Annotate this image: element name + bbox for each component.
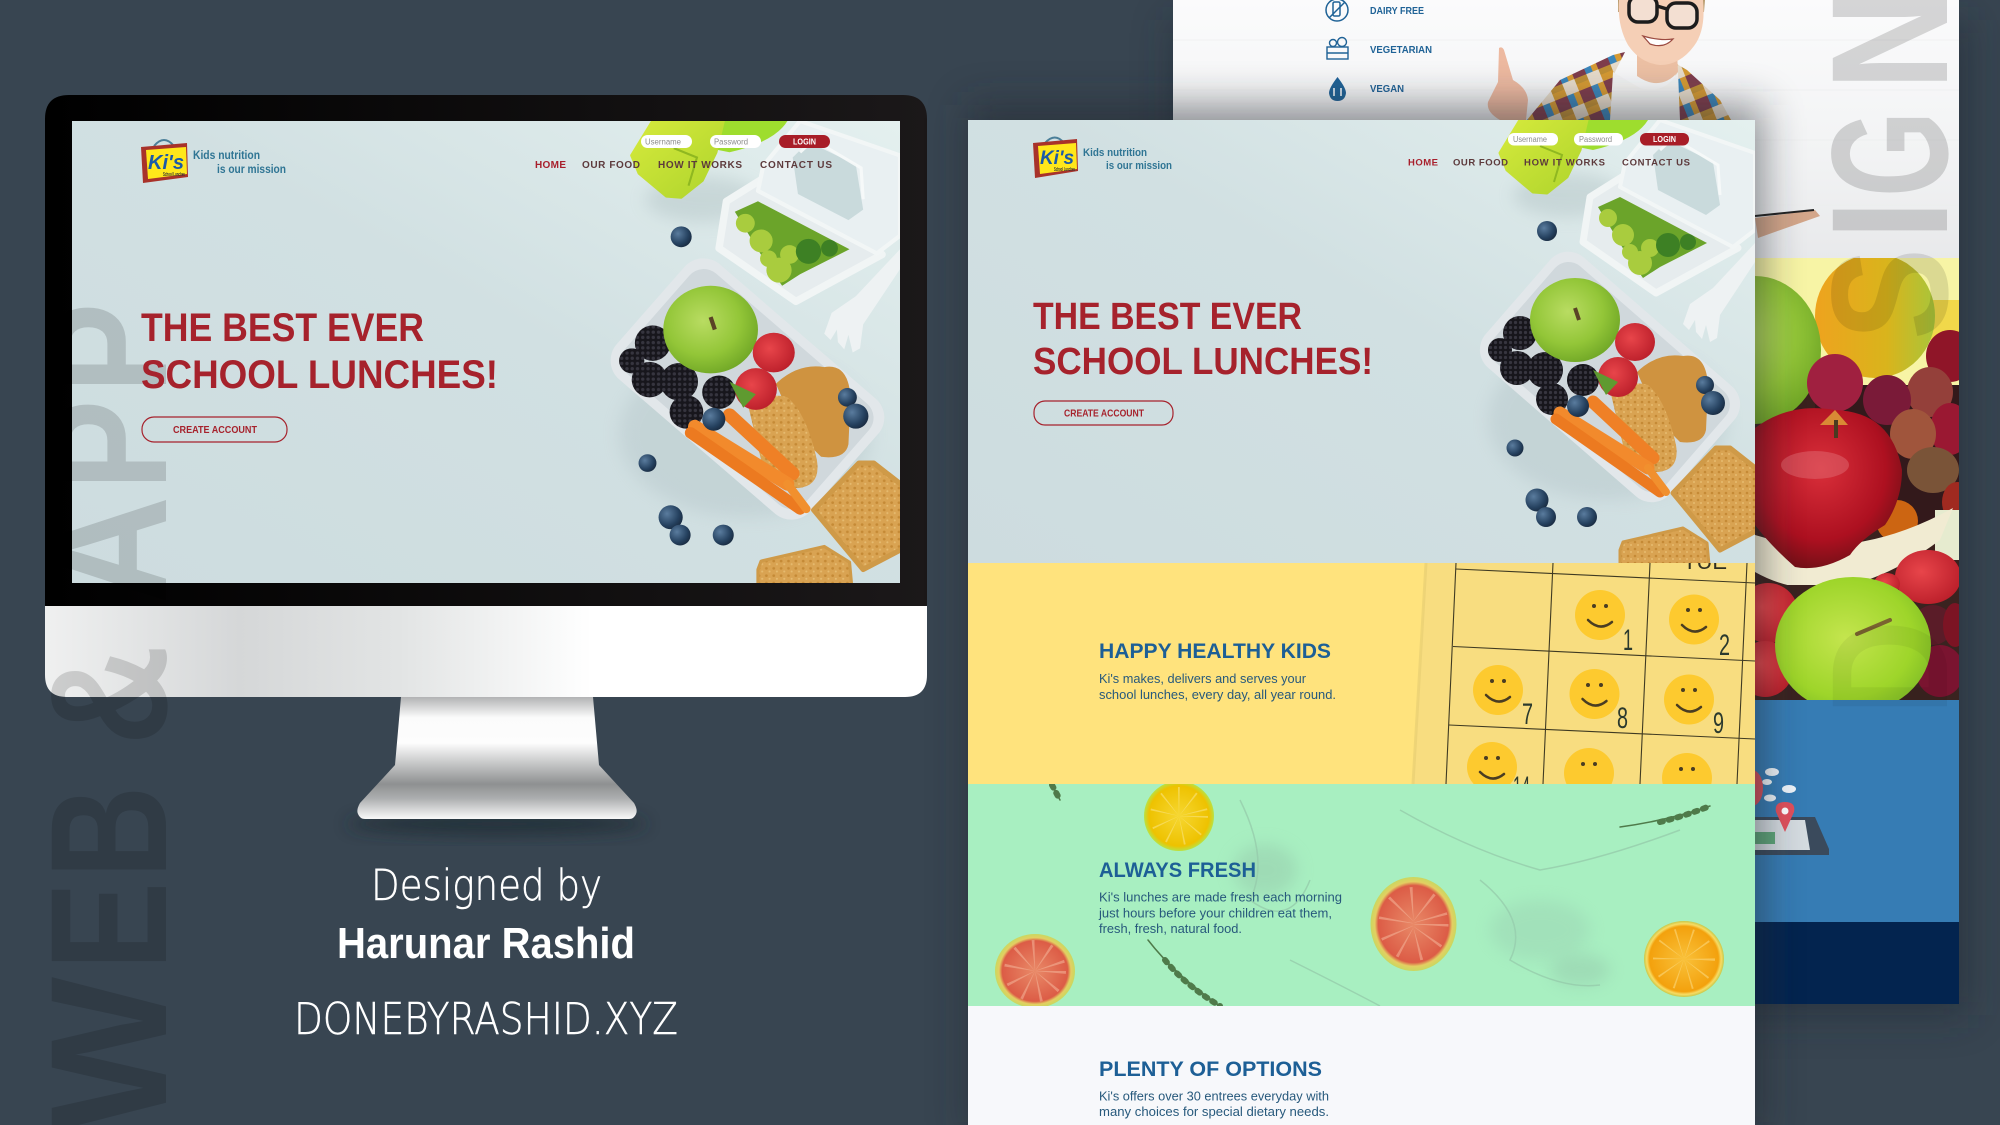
body text: school lunches, every day, all year round. [1099,688,1336,702]
body text [1099,1090,1329,1119]
watermark: WEB & APP: B [17,786,202,878]
icon: dairy free [1326,0,1348,21]
monitor screen background [72,121,900,583]
calendar grid [1446,563,1755,784]
label: vegan: VEGAN [1370,84,1404,95]
logo tagline [1083,147,1172,172]
logo: lunchbox: School Lunches [1054,167,1075,173]
monitor hero content [141,135,832,442]
headline [1033,296,1373,383]
smiley faces [1467,590,1719,803]
body text: Ki's makes, delivers and serves your [1099,672,1306,686]
navigation: HOME [1408,158,1438,168]
fruit: small orange [1878,500,1918,537]
panel: navy footer [1755,922,1959,1004]
watermark: DESIGN: G [1798,111,1983,197]
body text: fresh, fresh, natural food. [1099,922,1242,936]
label: vegetarian: VEGETARIAN [1370,45,1432,56]
heading: PLENTY OF OPTIONS [1099,1058,1322,1081]
boy glasses [1629,0,1697,28]
fruit: strawberries [1737,550,1961,697]
option icons and labels [1326,0,1432,101]
lemon slice [1144,781,1214,851]
login form [1508,133,1689,146]
logo tagline: is our mission [1106,160,1172,172]
login form: Password [1579,135,1612,144]
login form: Username [1513,135,1548,144]
logo tagline [193,150,286,176]
navigation [535,160,832,171]
credit: designed by [294,861,678,1045]
panel: fruit photo [1755,258,1959,700]
body text: just hours before your children eat them, [1098,906,1332,920]
logo: lunchbox: Ki's [1040,148,1074,169]
fruit: green apple left [1755,276,1821,424]
navigation: HOW IT WORKS [658,160,742,171]
panel: white options section [1173,0,1959,258]
logo: lunchbox: Ki's [148,152,184,174]
herb sprigs [1052,785,1710,1006]
logo tagline: Kids nutrition [193,150,260,162]
watermark: WEB & APP: P [17,303,202,393]
back page shadow [1173,20,1968,1015]
body text: Ki's offers over 30 entrees everyday with [1099,1090,1329,1104]
panel: plenty of options [968,1006,1755,1125]
headline: SCHOOL LUNCHES! [141,353,498,397]
headline: THE BEST EVER [1033,296,1302,338]
fruit: yellow citrus [1815,254,1935,378]
calendar numbers: 8 [1617,702,1628,735]
boy smile [1643,36,1673,46]
login form: Username [645,138,682,146]
orange slice [1644,921,1724,997]
calendar weekday labels: MON [1590,543,1641,568]
logo: lunchbox [1033,138,1078,178]
fruit: lower grapes [1920,605,1946,645]
front page [968,120,1758,1125]
watermark: WEB & APP: E [17,882,202,970]
watermark: DESIGN: D [1798,620,1983,715]
credit: designed by: Harunar Rashid [337,919,635,968]
logo: lunchbox: School Lunches [163,172,185,178]
food photo [1470,120,1758,565]
calendar weekday labels [1590,543,1727,574]
heading: HAPPY HEALTHY KIDS [1099,640,1331,663]
calendar numbers [1513,624,1730,804]
icon: vegetarian crate [1327,38,1348,59]
panel: blue map section [1741,700,1959,922]
create account button: CREATE ACCOUNT [1064,408,1144,420]
map pin [1776,802,1794,832]
grapefruit slice centre [1370,877,1456,971]
boy hand [1488,47,1528,120]
headline: SCHOOL LUNCHES! [1033,341,1373,383]
login form: LOGIN [793,136,816,146]
watermark: DESIGN: I [1798,200,1983,240]
monitor food photo [600,121,903,585]
back page panel [1173,0,1974,1004]
label: dairy free: DAIRY FREE [1370,6,1424,17]
headline [141,306,498,397]
calendar numbers: 1 [1623,624,1633,657]
watermark: WEB & APP [17,303,202,1125]
fruit: lower shadow area [1788,585,1816,589]
login form: Password [714,138,748,146]
login form [641,135,830,148]
navigation: OUR FOOD [1453,158,1508,168]
navigation [1408,158,1690,168]
stand shadow [347,813,647,835]
grapefruit slice left [995,934,1075,1008]
fruit: grapes [1807,330,1959,510]
create account button [142,417,287,442]
boy neck [1637,52,1678,83]
calendar numbers: 9 [1713,707,1724,740]
marble veins [1240,800,1680,1006]
front page shadow [968,105,1763,1125]
left map pin [1755,770,1763,806]
body text [1098,890,1342,936]
panel: always fresh [968,781,1755,1008]
navigation: CONTACT US [1622,158,1690,168]
navigation: HOME [535,160,566,171]
body text [1099,672,1336,702]
login form: LOGIN [1653,134,1676,144]
icon: vegan drop [1329,77,1346,101]
body text: many choices for special dietary needs. [1099,1105,1329,1119]
boy face [1619,0,1704,65]
smiley details [1480,620,1706,779]
phone [1755,817,1829,855]
boy hair [1618,0,1705,12]
watermark: WEB & APP: & [17,645,202,745]
watermark: WEB & APP: A [17,496,202,604]
navigation: HOW IT WORKS [1524,158,1605,168]
boy t-shirt [1610,72,1680,120]
fruit: red apple [1755,408,1902,568]
monitor [45,95,927,835]
headline: THE BEST EVER [141,306,424,350]
create account button [1034,401,1173,425]
monitor stand [357,697,637,819]
fruit: right pale background [1935,510,1959,560]
calendar weekday labels: TUE [1683,549,1727,574]
panel: happy healthy kids [968,563,1755,784]
fruit: green apple front [1775,577,1931,713]
monitor chin [45,606,927,697]
calendar numbers: 14 [1513,771,1530,804]
logo tagline: is our mission [217,164,286,176]
boy shirt [1527,52,1731,120]
navigation: CONTACT US [760,160,832,171]
map clouds [1762,768,1796,802]
fruit: bowl [1755,508,1953,589]
brick texture [1173,40,1959,205]
credit: designed by: DONEBYRASHID.XYZ [294,994,678,1045]
calendar paper [1413,563,1755,784]
navigation: OUR FOOD [582,160,640,171]
logo tagline: Kids nutrition [1083,147,1147,159]
body text: Ki's lunches are made fresh each morning [1099,890,1342,904]
book [1755,210,1820,238]
heading: ALWAYS FRESH [1099,859,1256,882]
credit: designed by: Designed by [371,861,602,911]
logo: lunchbox [141,140,188,183]
watermark: WEB & APP: P [17,400,202,490]
create account button: CREATE ACCOUNT [173,425,257,436]
panel: hero section [968,120,1758,565]
monitor bezel [45,95,927,606]
watermark: DESIGN: S [1798,248,1983,340]
calendar numbers: 7 [1522,698,1533,731]
watermark: DESIGN [1798,0,1983,715]
calendar numbers: 2 [1719,629,1730,662]
